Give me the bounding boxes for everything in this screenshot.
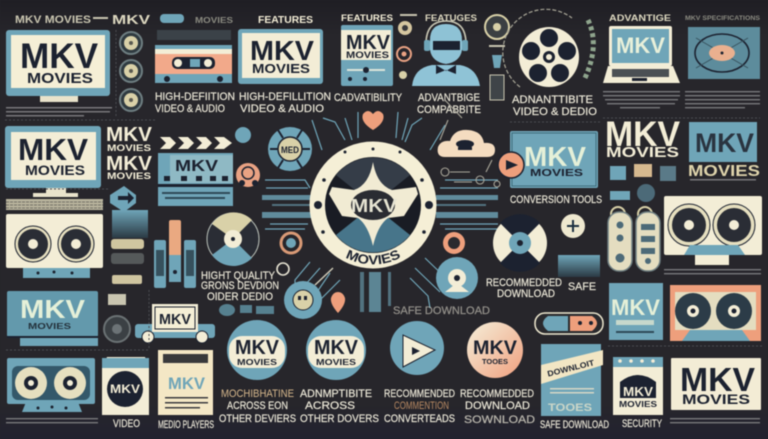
heading: advantage compatible: COMPABBITE	[417, 104, 481, 116]
panel: teal MKV screen with play: MKV	[524, 141, 586, 172]
central logo: MKV movies badge	[308, 140, 438, 270]
stacked MKV movies title left: MKV	[106, 124, 153, 146]
stacked MKV movies title left: MKV	[106, 153, 153, 175]
card: MKV video	[102, 357, 149, 415]
monitor: MKV Movies with keyboard: MKV	[18, 132, 88, 167]
icon: cloud	[438, 130, 495, 157]
big MKV movies title right: MOVIES	[606, 144, 679, 161]
heading: recommended download lower: RECOMMEDDED	[460, 388, 534, 400]
heading: compatibility across right: OTHER DOVERS	[300, 413, 379, 425]
heading: recommended download lower	[460, 388, 535, 426]
heading: compatibility across right: ACROSS	[305, 400, 355, 412]
card: media players paper: MKV	[168, 374, 206, 393]
icon: remote controls	[608, 212, 660, 271]
card: MKV video: MKV	[110, 382, 140, 396]
heading: high definition 2	[239, 91, 331, 115]
card: download tools: TOOES	[548, 402, 592, 414]
heading: recommended download	[486, 277, 562, 300]
icon: MKV vehicle: MKV	[159, 311, 191, 328]
monitor: MKV Movies 4	[341, 25, 393, 86]
heading: advantage compatible	[417, 92, 481, 116]
heading: high quality: OIDER DEDIO	[207, 291, 273, 303]
heading: conversion tools: CONVERSION TOOLS	[510, 194, 602, 206]
heading: compatibility across left: OTHER DEVIERS	[219, 413, 296, 425]
heading: compatibility across left	[219, 388, 296, 425]
top header strip: MKV SPECIFICATIONS	[685, 16, 760, 22]
icon: round speaker	[104, 294, 130, 342]
text lines under reel deck	[664, 269, 761, 274]
small caption lines	[6, 107, 112, 116]
panel: teal MKV dark sign	[688, 122, 760, 180]
icon: small teal node and peach headphones	[235, 127, 260, 187]
icon: three tubes	[154, 220, 196, 288]
small teal shapes	[219, 304, 274, 316]
icon: person with headset	[412, 21, 480, 86]
caption under teal cassette	[6, 418, 98, 423]
top header strip	[15, 12, 760, 27]
heading: recommended download lower: DOWNLOAD	[465, 400, 530, 412]
dividers	[5, 30, 762, 350]
monitor: MKV Movies 3: MKV	[250, 35, 314, 66]
heading: recommended converters: CONVERTEADS	[384, 413, 455, 425]
icon: heart	[362, 111, 384, 130]
monitor: MKV Movies large: MKV	[20, 37, 99, 76]
icon: peach dial and clock	[277, 233, 301, 275]
heading: advantage compatible: ADVANTBIGE	[418, 92, 480, 104]
stacked MKV movies title left	[106, 124, 153, 181]
monitor: MKV Movies large: MOVIES	[27, 70, 93, 87]
badge: MKV movies circle 1: MKV	[235, 337, 280, 359]
icon: peach ring	[443, 232, 465, 254]
monitor: MKV Movies 3: MOVIES	[252, 61, 310, 76]
circuit lines around central logo	[262, 112, 498, 312]
icon: teal gear badge	[268, 127, 312, 171]
icon: MKV vehicle	[135, 304, 215, 343]
card: big MKV movies: MOVIES	[682, 391, 750, 407]
icon: peach pin	[331, 292, 345, 313]
monitor: MKV Movies with keyboard: MOVIES	[25, 162, 85, 178]
icon: cream disc	[493, 214, 547, 272]
badge: MKV movies circle 1	[227, 320, 287, 380]
top header strip: ADVANTIGE	[609, 13, 671, 23]
badge: MKV tools peach	[467, 322, 523, 378]
central logo: MKV movies badge: MKV	[351, 196, 397, 216]
heading: high definition 1: VIDEO & AUDIO	[155, 103, 225, 115]
icon: button stack	[111, 239, 144, 284]
icon: plus circle and teal tile	[558, 214, 600, 277]
icon: toggle pill	[535, 313, 603, 334]
icon: clapperboard MKV	[158, 137, 233, 206]
heading: recommended converters	[384, 388, 455, 425]
label: media players: MEDIO PLAYERS	[158, 419, 214, 431]
icon: film reel with laurel	[503, 9, 593, 87]
panel: teal MKV screen with play	[498, 131, 598, 188]
heading: compatibility across left: ACROSS EON	[227, 400, 288, 412]
icon: peach cassette	[155, 30, 232, 83]
icon: laptop: MKV	[616, 33, 665, 58]
panel: teal MKV screen with play: MOVIES	[530, 168, 583, 179]
heading: recommended download lower: SOWNLOAD	[464, 414, 535, 426]
heading: safe: SAFE	[568, 281, 596, 293]
heading: high definition 2: HIGH-DEFILLITION	[239, 91, 331, 103]
top header strip: MKV MOVIES	[15, 14, 91, 26]
heading: high quality: HIGHT QUALITY	[201, 270, 276, 282]
play button circle	[390, 321, 444, 375]
monitor: MKV Movies 4: MOVIES	[346, 50, 389, 60]
big MKV movies title right: MKV	[605, 115, 681, 154]
heading: recommended converters: RECOMMENDED	[384, 388, 455, 400]
stacked MKV movies title left: MOVIES	[107, 171, 151, 181]
icon: small gauges by person	[397, 21, 412, 79]
central logo: MKV movies badge: MOVIES	[346, 249, 400, 266]
icon: peach reel cassette	[670, 285, 761, 341]
card: teal MKV: MKV	[611, 295, 660, 320]
heading: high definition 1: HIGH-DEFIITION	[155, 91, 235, 103]
icon: teal disc bottom centre	[284, 268, 333, 319]
heading: high quality	[201, 270, 279, 303]
monitor: MKV Movies with keyboard	[5, 126, 103, 210]
card: download tools: DOWNLOIT	[546, 358, 595, 379]
icon: teal gear badge: MED	[281, 145, 299, 155]
panel: teal MKV dark sign: MOVIES	[688, 163, 760, 180]
top header strip: FEATURES	[258, 15, 313, 26]
heading: advantage video and dedio: VIDEO & DEDIO	[513, 106, 597, 118]
heading: high definition 2: VIDEO & AUDIO	[240, 103, 324, 115]
icon: cream cassette recorder	[6, 214, 103, 278]
top header strip: FEATURES	[341, 13, 393, 23]
icon: teal arrow tile	[110, 186, 148, 238]
card: MKV movies security	[613, 357, 663, 415]
text block under picture	[685, 91, 760, 108]
heading: high definition 1	[155, 91, 235, 115]
panel: teal MKV dark sign: MKV	[695, 128, 754, 158]
heading: recommended download: RECOMMEDDED	[486, 277, 562, 289]
heading: high quality: GRONS DEVDION	[201, 280, 279, 292]
monitor: MKV Movies large	[6, 30, 110, 102]
icon: teal disc with light centre	[436, 257, 478, 299]
badge: MKV movies circle 1: MOVIES	[237, 357, 277, 367]
card: MKV movies security: MKV	[623, 384, 653, 399]
badge: MKV tools peach: TOOES	[482, 359, 508, 366]
heading: compatibility across left: MOCHIBHATINE	[221, 388, 294, 400]
badge: MKV tools peach: MKV	[473, 338, 517, 359]
badge: MKV movies circle 2	[306, 320, 366, 380]
heading: compatibility across right: ADNMPTIBITE	[300, 388, 372, 400]
icon: teal cassette	[7, 358, 95, 412]
panel: teal MKV cassette screen: MKV	[20, 294, 86, 324]
icon: laptop	[603, 26, 680, 83]
label: safe download: SAFE DOWNLOAD	[540, 419, 609, 431]
heading: recommended download: DOWNLOAD	[497, 288, 555, 300]
icon: cream reel deck	[664, 196, 762, 265]
card: big MKV movies	[671, 358, 761, 410]
panel: teal picture with ellipse	[688, 27, 760, 79]
heading: advantage video and dedio: ADNANTTIBITE	[512, 94, 593, 106]
heading: recommended converters: COMMENTION	[394, 400, 449, 412]
monitor: MKV Movies 3	[238, 29, 323, 84]
icon: clapperboard MKV: MKV	[175, 158, 218, 175]
top header strip: MOVIES	[195, 16, 234, 25]
top header strip: MKV	[112, 12, 150, 27]
text block under laptop	[603, 91, 680, 108]
icon: small dial and tower	[485, 15, 509, 100]
icon: vinyl disc	[207, 212, 259, 266]
stacked MKV movies title left: MOVIES	[107, 143, 151, 153]
badge: MKV movies circle 2: MOVIES	[316, 357, 356, 367]
heading: compatibility across right	[300, 388, 379, 425]
heading: compatibility: CADVATIBILITY	[334, 92, 403, 104]
card: MKV movies security: MOVIES	[619, 400, 658, 409]
panel: teal MKV cassette screen	[7, 291, 98, 346]
faded label: safe download: SAFE DOWNLOAD	[393, 305, 490, 317]
heading: advantage video and dedio	[512, 94, 597, 118]
caption under big card	[670, 418, 760, 423]
icons beside cloud	[440, 100, 500, 187]
top header strip: FEATUGES	[425, 13, 477, 23]
card: teal MKV	[609, 283, 663, 340]
small icon cluster	[610, 164, 676, 221]
icon: speakers	[120, 32, 142, 111]
card: big MKV movies: MKV	[680, 361, 755, 398]
monitor: MKV Movies 4: MKV	[346, 32, 391, 54]
label: video: VIDEO	[113, 418, 140, 430]
label: security: SECURITY	[622, 418, 662, 430]
card: download tools	[541, 344, 603, 416]
badge: MKV movies circle 2: MKV	[314, 337, 359, 359]
card: media players paper	[158, 350, 213, 415]
panel: teal MKV cassette screen: MOVIES	[28, 322, 72, 331]
